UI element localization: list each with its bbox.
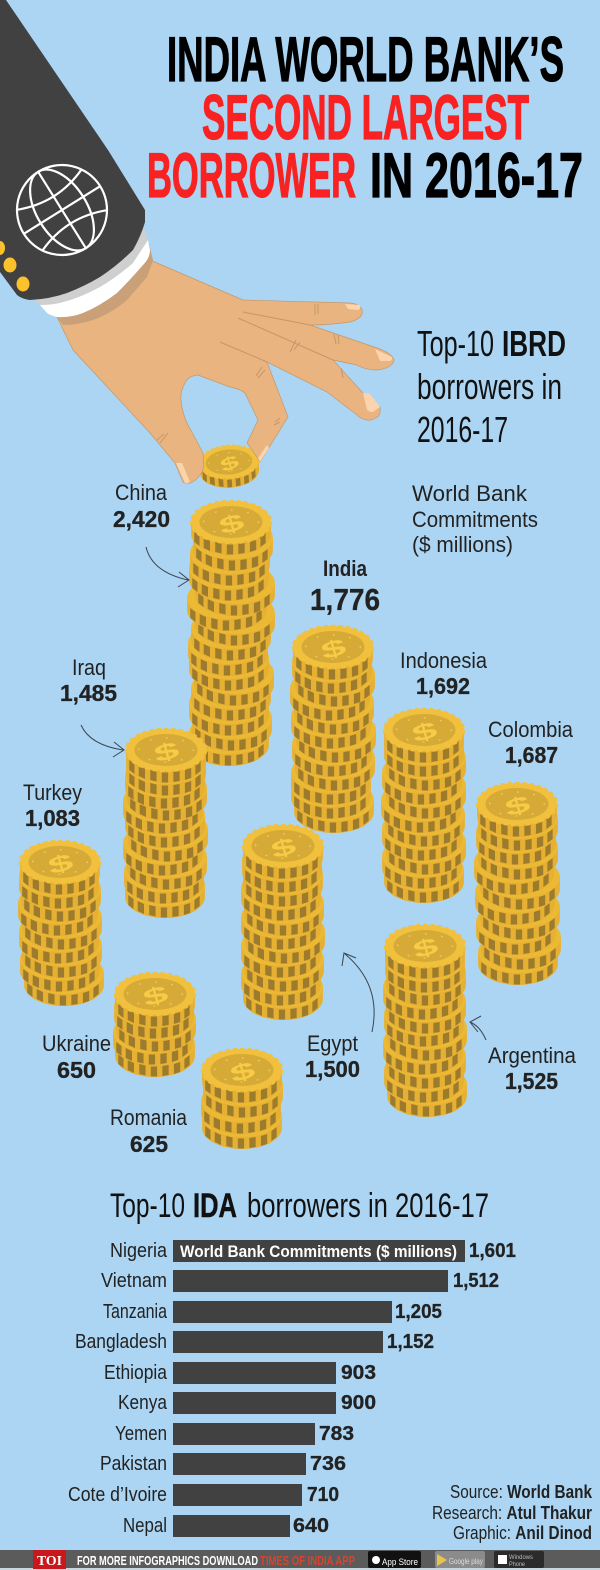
badge: Windows Phone: Windows — [509, 1555, 533, 1561]
coin stack: India: $ — [318, 633, 349, 665]
bar: Tanzania — [103, 1301, 442, 1323]
badge: App Store: App Store — [382, 1557, 418, 1567]
coin held in fingers: $ — [218, 451, 242, 476]
bar chart: IDA borrowers — [68, 1240, 516, 1537]
label: China: China — [115, 480, 168, 505]
footer bar — [0, 1550, 600, 1570]
label: Ukraine: Ukraine — [42, 1031, 111, 1056]
heading: top-10 IBRD borrowers: Top-10 — [417, 323, 494, 364]
chart subtitle: Commitments — [412, 507, 538, 532]
bar: Nigeria: Nigeria — [110, 1240, 168, 1262]
sleeve — [0, 0, 145, 300]
bar: Nigeria: 1,601 — [469, 1240, 516, 1262]
label: Colombia — [488, 717, 574, 768]
coin stack: Iraq — [123, 729, 208, 918]
coin stack: Iraq: $ — [151, 736, 182, 768]
bar: Tanzania: 1,205 — [395, 1301, 442, 1323]
source credits — [432, 1482, 593, 1543]
label: Argentina — [488, 1043, 577, 1094]
coin stack: Egypt — [241, 825, 325, 1020]
bar: Vietnam: 1,512 — [453, 1270, 499, 1292]
coin stack: Romania — [201, 1049, 283, 1149]
label: China — [113, 480, 170, 532]
chart subtitle: World Bank — [412, 481, 528, 506]
bar: Nepal: Nepal — [123, 1515, 167, 1537]
label: India — [310, 556, 380, 617]
bar: Pakistan: Pakistan — [100, 1453, 167, 1475]
bar: Tanzania: Tanzania — [103, 1301, 168, 1323]
bar: Nepal — [123, 1515, 329, 1537]
bar: Kenya: 900 — [341, 1392, 376, 1414]
finger creases — [157, 304, 343, 443]
heading: top-10 IDA borrowers — [110, 1187, 489, 1225]
heading: top-10 IDA borrowers: IDA — [193, 1187, 237, 1225]
coin stack: Argentina — [383, 925, 467, 1117]
label: Romania: Romania — [110, 1105, 188, 1130]
coin stack: China: $ — [216, 508, 247, 540]
bar: Kenya — [118, 1392, 376, 1414]
footer message: FOR MORE INFOGRAPHICS DOWNLOAD — [77, 1553, 258, 1568]
title — [147, 25, 583, 211]
heading: top-10 IBRD borrowers — [417, 323, 566, 450]
shirt cuff — [40, 225, 150, 317]
label: Turkey — [23, 780, 82, 831]
bar: Vietnam — [101, 1270, 499, 1292]
arrow: Argentina — [470, 1016, 486, 1040]
title: BORROWER — [147, 141, 356, 211]
label: China: 2,420 — [113, 506, 170, 532]
footer message: TIMES OF INDIA APP — [260, 1553, 355, 1568]
bar: Nepal: 640 — [293, 1515, 329, 1537]
bar: Ethiopia: Ethiopia — [104, 1362, 168, 1384]
TOI logo: TOI — [37, 1554, 62, 1569]
coin stack: Ukraine: $ — [140, 980, 171, 1012]
illustration: hand in suit sleeve — [0, 0, 394, 490]
coin stack: Indonesia — [381, 709, 466, 903]
label: Iraq — [60, 655, 117, 706]
bar: Vietnam: Vietnam — [101, 1270, 167, 1292]
chart subtitle — [412, 481, 538, 557]
country labels — [23, 480, 577, 1157]
bar: Cote d'Ivoire: Cote d’Ivoire — [68, 1484, 167, 1506]
bar: Cote d'Ivoire — [68, 1484, 339, 1506]
arrow: Iraq — [81, 725, 124, 757]
label: Indonesia: Indonesia — [400, 648, 488, 673]
badge: Google play — [435, 1551, 485, 1568]
label: Indonesia — [400, 648, 488, 699]
heading: top-10 IBRD borrowers: 2016-17 — [417, 409, 508, 450]
jacket inner band — [20, 225, 148, 305]
heading: top-10 IDA borrowers: Top-10 — [110, 1187, 185, 1225]
label: Argentina: Argentina — [488, 1043, 577, 1068]
label: Argentina: 1,525 — [505, 1068, 558, 1094]
badge: Google play: Google play — [449, 1557, 483, 1566]
coin stack: Egypt: $ — [268, 832, 299, 864]
arrow: Egypt — [342, 953, 374, 1032]
label: Indonesia: 1,692 — [416, 673, 470, 699]
label: Egypt: 1,500 — [305, 1056, 360, 1082]
label: Colombia: 1,687 — [505, 742, 558, 768]
coin stack: China — [187, 501, 275, 766]
bar: Bangladesh: 1,152 — [387, 1331, 434, 1353]
bar: Bangladesh: Bangladesh — [75, 1331, 167, 1353]
bar: Nigeria — [110, 1240, 516, 1262]
label: Iraq: 1,485 — [60, 680, 117, 706]
label: India: 1,776 — [310, 582, 380, 617]
bar: Cote d'Ivoire: 710 — [307, 1484, 339, 1506]
TOI logo — [33, 1550, 66, 1569]
sleeve buttons — [0, 241, 30, 292]
bar: Kenya: Kenya — [118, 1392, 168, 1414]
label: Turkey: 1,083 — [25, 805, 80, 831]
label: Ukraine — [42, 1031, 111, 1083]
label: Turkey: Turkey — [23, 780, 82, 805]
label: Egypt — [305, 1031, 360, 1082]
coin stack: Colombia: $ — [502, 790, 533, 822]
badge: App Store — [368, 1551, 421, 1568]
coin stack: Indonesia: $ — [409, 716, 440, 748]
label: Ukraine: 650 — [57, 1057, 96, 1083]
coin stack: Turkey — [18, 841, 104, 1006]
coin stack: India — [290, 626, 376, 833]
coin stack: Turkey: $ — [45, 848, 76, 880]
bar: Ethiopia — [104, 1362, 376, 1384]
bar: Ethiopia: 903 — [341, 1362, 376, 1384]
coin stack: Ukraine — [113, 973, 196, 1077]
label: Romania: 625 — [130, 1131, 168, 1157]
label: India: India — [323, 556, 368, 581]
bar: Pakistan: 736 — [310, 1453, 346, 1475]
heading: top-10 IBRD borrowers: IBRD — [502, 323, 566, 364]
bar: Pakistan — [100, 1453, 346, 1475]
label: Romania — [110, 1105, 188, 1157]
bar: Nigeria: World Bank Commitments ($ millions) — [180, 1242, 457, 1261]
arrow: China — [146, 547, 189, 587]
bar: Yemen: 783 — [319, 1423, 354, 1445]
bar: Yemen — [115, 1423, 354, 1445]
heading: top-10 IDA borrowers: borrowers in 2016-17 — [247, 1187, 489, 1225]
wrist shadow — [57, 240, 153, 325]
icon: globe — [0, 148, 124, 272]
badge: Windows Phone — [494, 1551, 544, 1568]
coin stack: Colombia — [474, 783, 561, 985]
badge: Windows Phone: Phone — [509, 1562, 526, 1568]
coin held in fingers — [198, 443, 260, 490]
chart subtitle: ($ millions) — [412, 532, 513, 557]
label: Egypt: Egypt — [307, 1031, 358, 1056]
coin stack: Romania: $ — [227, 1056, 258, 1088]
label: Iraq: Iraq — [72, 655, 106, 680]
coin stack: Argentina: $ — [410, 932, 441, 964]
bar: Yemen: Yemen — [115, 1423, 167, 1445]
hand — [57, 260, 394, 483]
label: Colombia: Colombia — [488, 717, 574, 742]
fingernails — [176, 304, 392, 483]
bar: Bangladesh — [75, 1331, 434, 1353]
